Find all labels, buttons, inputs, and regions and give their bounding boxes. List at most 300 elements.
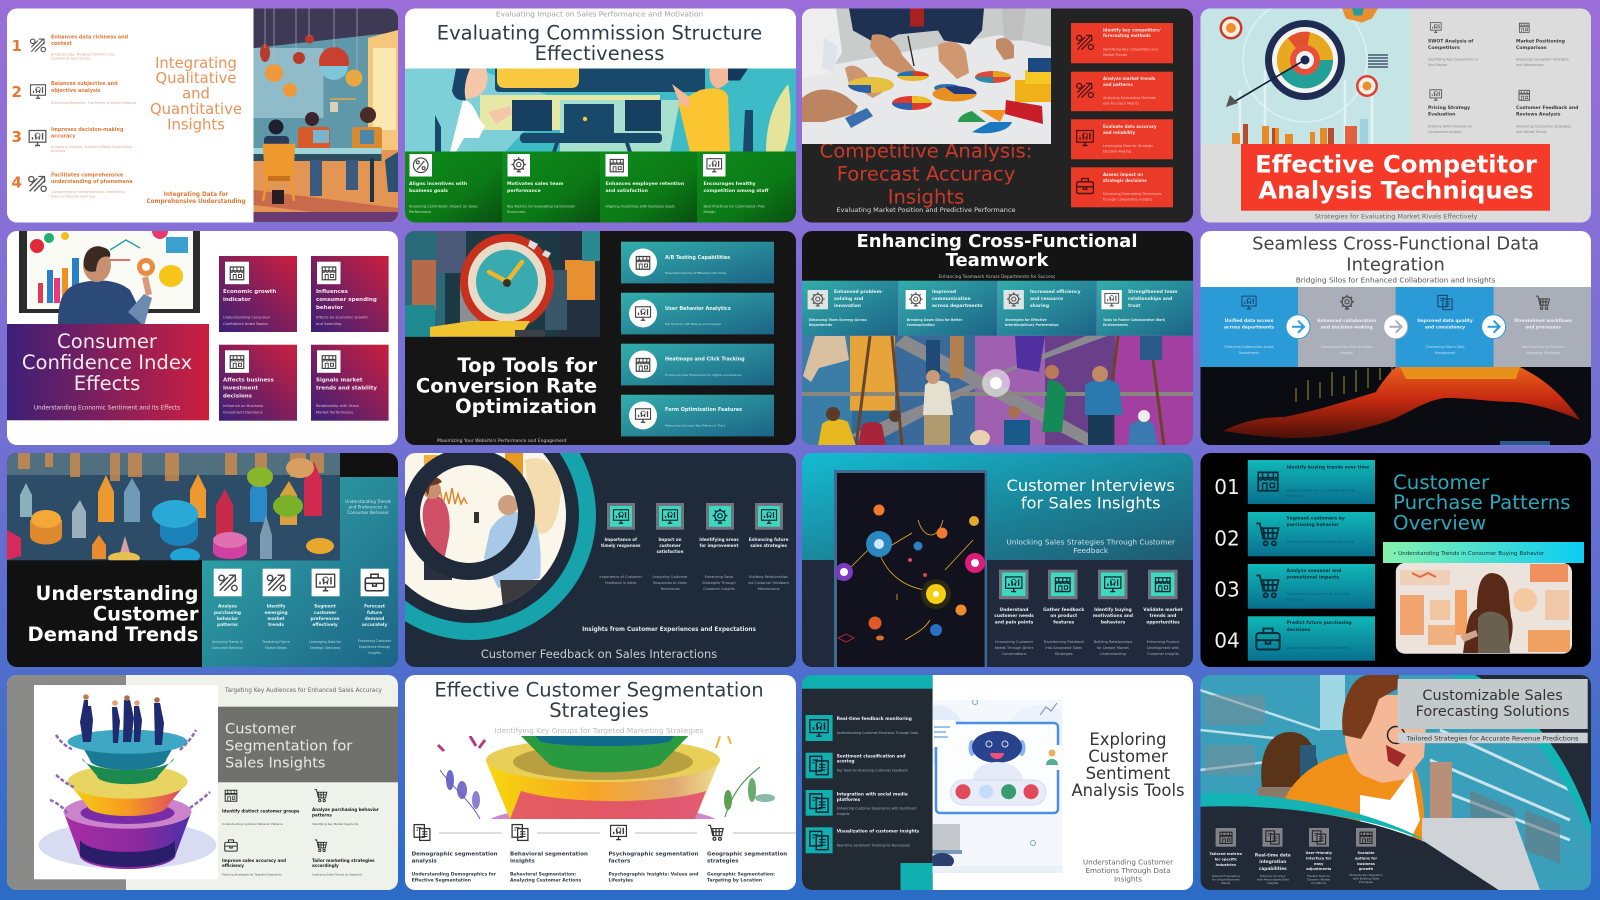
item 2: Transforming Feedback xyxy=(1042,640,1085,644)
illustration: target and arrow xyxy=(1200,0,1410,144)
item 3: Evaluate data accuracy xyxy=(1103,124,1157,129)
item 2 xyxy=(1516,23,1569,67)
item 4: Visualization of customer insights xyxy=(837,829,920,835)
item 1: Tailored Forecasting xyxy=(1211,874,1240,878)
item 3: Enhances employee retention xyxy=(606,181,684,187)
item 3 xyxy=(12,127,132,153)
item 4: 4 xyxy=(12,174,22,192)
item 4 xyxy=(1349,828,1383,884)
panel: Customer Segmentation for Sales Insights xyxy=(7,675,398,890)
item 3 xyxy=(309,569,342,650)
tool 4: Measuring Success: Key Metrics to Track xyxy=(665,424,726,428)
column 4: Best Practices for Effective xyxy=(1522,345,1564,349)
item 2: Analyzing Competitor Strengths xyxy=(1516,58,1569,62)
column 1: Unified data access xyxy=(1225,318,1274,324)
item 1: Uncovering Customer xyxy=(995,640,1034,644)
item 4: Customer Insights xyxy=(1147,652,1179,656)
item 4: Tools to Foster Collaborative Work xyxy=(1103,318,1166,322)
subtitle bar: Tailored Strategies for Accurate Revenue Predictions xyxy=(1406,734,1579,742)
item 2: Comparison xyxy=(1516,45,1547,51)
subtitle: Comprehensive Understanding xyxy=(146,199,246,205)
row 01: Identify buying trends over time xyxy=(1286,464,1369,470)
item 1: Qualitative Approaches xyxy=(51,56,91,60)
item 2: Analyzing Customer xyxy=(652,575,688,579)
item 1 xyxy=(1071,23,1173,63)
title: Teamwork xyxy=(946,250,1049,271)
panel: Effective Competitor Analysis Techniques xyxy=(1200,0,1592,222)
title: Customizable Sales xyxy=(1422,688,1563,704)
item 2: Identifying Key Market Segments xyxy=(312,822,359,826)
arrow 1 xyxy=(1286,315,1310,339)
item 1: Importance of xyxy=(604,537,637,542)
item 3: Interdisciplinary Partnerships xyxy=(1005,323,1059,327)
tile 2: consumer spending xyxy=(316,297,377,303)
item 3: easy xyxy=(1314,862,1324,866)
subtitle: Strategies for Evaluating Market Rivals Effectively xyxy=(1315,212,1477,220)
panel: Understanding Customer Demand Trends xyxy=(7,453,398,667)
tool 1 xyxy=(621,242,774,283)
subtitle: Unlocking Sales Strategies Through Customer xyxy=(1006,538,1176,546)
item 3: Segment xyxy=(314,604,336,610)
item 2: and Accuracy Metrics xyxy=(1103,102,1140,106)
step 1 xyxy=(412,825,502,884)
item 3: adjustments xyxy=(1306,867,1331,871)
item 2 xyxy=(312,790,379,826)
item 4: Reviews Analysis xyxy=(1516,112,1561,118)
bottom panel xyxy=(802,560,1193,667)
item 2: Motivates sales team xyxy=(507,181,564,187)
title: Sentiment xyxy=(1086,764,1171,783)
item 3: 3 xyxy=(12,128,22,146)
item 4: Enhancing Forecasting Techniques xyxy=(1103,192,1162,196)
step 1: analysis xyxy=(412,858,438,864)
title: Customer xyxy=(93,602,199,626)
item 3: Integration with social media xyxy=(837,792,908,798)
item 4 xyxy=(806,827,920,853)
item 4 xyxy=(12,172,133,198)
top gradient xyxy=(802,453,1193,560)
column 2: and decision-making xyxy=(1321,324,1373,330)
column 3 xyxy=(1396,287,1494,367)
tile 1: Economic growth xyxy=(223,289,276,295)
item 1: forecasting methods xyxy=(1103,33,1151,38)
row 04 xyxy=(1214,616,1375,661)
item 3: effectively xyxy=(312,622,338,628)
store photo background xyxy=(1200,675,1592,890)
item 4: demand xyxy=(365,616,384,622)
item 1: Understanding Customer Emotions Through Data xyxy=(837,731,918,735)
item 4 xyxy=(358,569,392,655)
item 1: Identify distinct customer groups xyxy=(222,808,300,814)
item 2 xyxy=(1042,570,1085,656)
item 4: and Market Trends xyxy=(1516,130,1547,134)
item 2: Sentiment classification and xyxy=(837,754,906,760)
row 03: Frequency xyxy=(1286,598,1305,602)
item 1: timely responses xyxy=(601,543,641,548)
title: Conversion Rate xyxy=(416,374,597,398)
panel: Exploring Customer Sentiment Analysis Tools xyxy=(802,675,1193,890)
item 1 xyxy=(599,503,643,585)
item 3: Building Relationships xyxy=(1094,640,1132,644)
caption: Consumer Behavior xyxy=(347,510,389,515)
item 2: market xyxy=(267,616,285,622)
kicker: Evaluating Impact on Sales Performance and Motivation xyxy=(496,10,703,18)
panel: Customer Purchase Patterns Overview xyxy=(1200,453,1592,667)
tile 3: investment xyxy=(223,386,258,392)
item 1: Analyze xyxy=(218,604,237,610)
item 3: interface for xyxy=(1306,856,1332,860)
panel background xyxy=(7,675,398,890)
item 2: Responses to Sales xyxy=(653,581,687,585)
row 01: Behavior xyxy=(1286,494,1303,498)
item 2: 2 xyxy=(12,83,22,101)
item 4: Enhancing Product xyxy=(1147,640,1180,644)
column 2 xyxy=(1298,287,1396,367)
illustration: sentiment robot xyxy=(905,700,1075,873)
teal column 2 xyxy=(898,281,997,336)
step 2: Analyzing Customer Actions xyxy=(510,878,581,884)
title: Consumer xyxy=(57,330,158,353)
subtitle: Bridging Silos for Enhanced Collaboration and Insights xyxy=(1296,276,1496,284)
item 2: trends xyxy=(268,622,284,628)
item 4: Strengthened team xyxy=(1128,289,1178,295)
step 4 xyxy=(707,825,796,884)
step 1: Understanding Demographics for xyxy=(412,872,497,878)
step 3: Psychographic Insights: Values and xyxy=(608,872,698,878)
tile 1: Understanding Consumer xyxy=(223,316,271,320)
item 1 xyxy=(1210,828,1242,885)
item 2: Strategies xyxy=(1055,652,1073,656)
row 02: Factors Influencing Purchase Decisions xyxy=(1286,540,1355,544)
item 4: Environments xyxy=(1103,323,1128,327)
item 2: Communication xyxy=(907,323,935,327)
item 1: Needs xyxy=(1221,881,1231,885)
title: and xyxy=(182,86,210,102)
tool 2: User Behavior Analytics xyxy=(665,306,731,312)
step 3: factors xyxy=(608,858,631,864)
item 3: Analysis xyxy=(51,149,65,153)
item 2: Structures xyxy=(507,210,525,214)
item 3: Identify buying xyxy=(1094,607,1132,613)
title: Customer xyxy=(1088,747,1168,766)
item 4: Analyzing Sales Trends by Segment xyxy=(312,872,363,876)
panel background xyxy=(802,8,1193,222)
item 1: Understand xyxy=(1000,607,1028,613)
row 03 xyxy=(1214,564,1375,609)
item 4: Enhancing future xyxy=(749,537,789,542)
title: Analysis Tools xyxy=(1071,781,1185,800)
item 1: Departments xyxy=(809,323,832,327)
item 4: opportunities xyxy=(1146,620,1180,626)
item 3: accuracy xyxy=(51,134,76,140)
item 3: User-friendly xyxy=(1305,851,1333,855)
item 1: Tailored metrics xyxy=(1210,852,1242,856)
tool 2: Top Tools for A/B Testing and Analysis xyxy=(664,322,721,326)
man with glasses xyxy=(1279,675,1540,890)
item 2: Gather feedback xyxy=(1043,607,1084,613)
tile 2: Influences xyxy=(316,289,349,295)
item 3: Understanding xyxy=(1100,652,1126,656)
dark curved panel xyxy=(1200,806,1499,890)
item 3: platforms xyxy=(837,797,861,803)
item 4: strategic decisions xyxy=(1103,178,1147,183)
arrow 2 xyxy=(1384,315,1408,339)
item 2: and Weaknesses xyxy=(1516,63,1544,67)
panel background xyxy=(405,8,796,222)
row 04: 04 xyxy=(1214,628,1240,652)
item 2: features xyxy=(1053,620,1074,626)
item 2: objective analysis xyxy=(51,88,101,94)
tool 4: Form Optimization Features xyxy=(665,407,742,413)
tile 4: Signals market xyxy=(316,378,363,384)
item 4: sales strategies xyxy=(750,543,788,548)
panel background xyxy=(405,231,796,445)
step 2: Behavioral Segmentation: xyxy=(510,872,576,878)
title: Seamless Cross-Functional Data xyxy=(1252,234,1539,254)
title: Sales Insights xyxy=(225,754,326,772)
title: Top Tools for xyxy=(457,354,597,377)
title: Insights xyxy=(167,116,225,134)
item 1 xyxy=(12,34,129,60)
subtitle: Feedback xyxy=(1073,546,1109,555)
item 3: customer xyxy=(314,610,337,616)
tile 3: decisions xyxy=(223,394,253,400)
teal column 4 xyxy=(1097,281,1193,336)
step 1: Effective Segmentation xyxy=(412,878,471,884)
row 02: purchasing behavior xyxy=(1286,522,1339,528)
column 4: and processes xyxy=(1525,324,1561,330)
item 1: Identifying Key Competitors and xyxy=(1103,48,1158,52)
panel: Integrating Qualitative and Quantitative Insights xyxy=(7,8,398,222)
item 1: solving and xyxy=(834,296,863,302)
item 4 xyxy=(1143,570,1183,656)
gray side strip xyxy=(7,675,126,890)
item 3: efficiency xyxy=(222,863,244,868)
title: for Sales Insights xyxy=(1021,494,1161,512)
item 2: across departments xyxy=(932,303,983,309)
item 4 xyxy=(1071,167,1173,207)
column 3: Overcoming Silos in Data xyxy=(1425,345,1465,349)
title: Forecast Accuracy xyxy=(837,162,1016,186)
dark inner ring xyxy=(412,456,526,572)
tool 1: Essential Features of Effective CRO Tools xyxy=(665,271,726,275)
item 2: Real-time data xyxy=(1255,852,1291,858)
column 3: and consistency xyxy=(1425,324,1465,330)
column 1: across departments xyxy=(1224,324,1274,330)
title: Analysis Techniques xyxy=(1258,176,1534,204)
row 04: Analyzing Seasonal Buying Patterns xyxy=(1286,646,1349,650)
item 4: Scalable xyxy=(1357,851,1375,855)
item 1: Analyzing Commission Impact on Sales xyxy=(409,204,478,208)
tile 2: Effects on Economic Growth xyxy=(316,316,369,320)
item 3: Improves decision-making xyxy=(51,127,124,133)
column 4: Integration Strategies xyxy=(1526,351,1560,355)
column 3: Management xyxy=(1435,351,1456,355)
item 4: competition among staff xyxy=(704,188,769,194)
item 1: Understanding Customer Behavior Patterns xyxy=(222,822,283,826)
item 2: Improved xyxy=(932,289,956,295)
column 1 xyxy=(1200,287,1298,367)
item 1: Bridging Data: Merging Statistics and xyxy=(51,52,114,56)
item 2 xyxy=(1255,828,1291,885)
item 3: and resource xyxy=(1030,296,1063,302)
step 3: Psychographic segmentation xyxy=(608,852,698,858)
subtitle bar xyxy=(1383,542,1584,563)
title block xyxy=(1398,679,1588,729)
item 2: performance xyxy=(507,188,541,194)
teal ring xyxy=(354,398,588,632)
column 2: Enhanced collaboration xyxy=(1317,318,1376,324)
item 2 xyxy=(652,503,688,591)
item 1 xyxy=(222,790,300,826)
panel: Seamless Cross-Functional Data Integration xyxy=(1200,231,1592,445)
item 3: Insights xyxy=(837,812,850,816)
subtitle: Emotions Through Data xyxy=(1086,866,1170,875)
item 1: SWOT Analysis of xyxy=(1428,38,1474,44)
subtitle: Evaluating Market Position and Predictive Performance xyxy=(836,206,1016,214)
item 4: Building Relationships xyxy=(749,575,788,579)
title: Effective Competitor xyxy=(1255,150,1537,178)
item 2: scoring xyxy=(837,758,854,764)
tile 3: Influence on Business xyxy=(223,404,263,408)
arrow 3 xyxy=(1482,315,1506,339)
tile 2: behavior xyxy=(316,305,344,311)
item 3: Utilizing SWOT Analysis for xyxy=(1428,124,1473,128)
item 4: Mechanisms xyxy=(758,587,780,591)
item 2: Enhance Accuracy xyxy=(1260,874,1286,878)
column 3: Improved data quality xyxy=(1417,318,1473,324)
item 2: Market Needs xyxy=(265,646,287,650)
tile 1 xyxy=(219,256,297,332)
item 4: accordingly xyxy=(312,863,339,868)
title: Competitive Analysis: xyxy=(820,140,1032,162)
title: Evaluating Commission Structure xyxy=(437,22,762,44)
item 1 xyxy=(1428,23,1478,67)
item 4: relationships and xyxy=(1128,296,1172,302)
item 2 xyxy=(906,289,983,327)
item 3: Leveraging Data for Strategic xyxy=(1103,144,1153,148)
item 1: Consumer Behavior xyxy=(212,646,244,650)
kicker: Targeting Key Audiences for Enhanced Sales Accuracy xyxy=(224,688,383,694)
row 01: Identifying Trends in Consumer Buying xyxy=(1286,488,1354,492)
tool 3: Heatmaps and Click Tracking xyxy=(665,356,745,362)
item 2: on product xyxy=(1050,613,1077,619)
title: Segmentation for xyxy=(225,738,352,754)
tile 4: Relationship with Stock xyxy=(316,404,360,408)
row 04: decisions xyxy=(1286,627,1310,633)
title: Overview xyxy=(1393,512,1486,534)
item 2: satisfaction xyxy=(656,549,684,554)
item 4: Monitoring Competitor Strategies xyxy=(1516,124,1571,128)
title: Understanding xyxy=(36,582,198,605)
item 3: Enhancing Customer Experience with Sentiment xyxy=(837,806,917,810)
subtitle: Insights xyxy=(1114,874,1142,884)
tile 3 xyxy=(219,345,297,421)
item 1: Enhanced problem- xyxy=(834,289,883,295)
item 4: trends and xyxy=(1150,613,1176,619)
title block xyxy=(7,324,209,420)
item 4: Encourages healthy xyxy=(704,181,756,187)
item 1: Performance xyxy=(409,210,431,214)
panel background xyxy=(1200,231,1592,287)
panel background xyxy=(1200,8,1592,222)
item 4 xyxy=(312,840,375,876)
item 1: customer needs xyxy=(994,613,1034,619)
item 1: Needs Through Direct xyxy=(995,646,1034,650)
item 2: patterns xyxy=(312,812,332,818)
item 1 xyxy=(212,569,244,650)
item 3: sharing xyxy=(1030,303,1049,309)
item 3: Identifying areas xyxy=(699,537,739,542)
item 4 xyxy=(703,154,769,214)
title: Insights xyxy=(888,186,964,208)
panel: Top Tools for Conversion Rate Optimization xyxy=(405,231,796,445)
item 4: Validate market xyxy=(1143,607,1183,613)
data landscape image xyxy=(1200,367,1592,445)
tool 4 xyxy=(621,395,774,436)
item 1: purchasing xyxy=(214,610,241,616)
step 2 xyxy=(510,825,600,884)
item 1: Competitors xyxy=(1428,45,1460,51)
item 1: Market Trends xyxy=(1103,53,1127,57)
panel background xyxy=(7,8,398,222)
item 2: Top Tools for Analyzing Customer Feedback xyxy=(836,768,908,772)
item 1: industries xyxy=(1216,863,1236,867)
item 1 xyxy=(409,154,478,214)
panel: Customer Interviews for Sales Insights xyxy=(802,453,1193,667)
green column 3 xyxy=(600,152,697,222)
column 4 xyxy=(1494,287,1592,367)
panel background xyxy=(405,675,796,890)
item 3: Strategies for Effective xyxy=(1005,318,1047,322)
teal corner block xyxy=(900,863,933,890)
panel: Competitive Analysis Forecast Accuracy Insights xyxy=(802,8,1193,222)
panel background xyxy=(7,231,398,445)
panel background xyxy=(1200,453,1592,667)
row 01 xyxy=(1214,460,1375,504)
tile 1: indicator xyxy=(223,297,251,303)
item 4: Development with xyxy=(1147,646,1179,650)
bold insight line: Insights from Customer Experiences and Expectations xyxy=(582,627,756,633)
item 3: Aligning Incentives with Business Goals xyxy=(606,204,675,208)
item 2: Key Metrics for Evaluating Commission xyxy=(507,204,575,208)
title: Customer xyxy=(1393,471,1490,494)
item 3: Strategic Decisions xyxy=(310,646,341,650)
panel: Effective Customer Segmentation Strategies xyxy=(405,675,796,890)
item 1: Identifying Key Competitors in xyxy=(1428,58,1478,62)
tile 2: and Spending xyxy=(316,322,341,326)
step 2: Behavioral segmentation xyxy=(510,852,588,858)
title: Exploring xyxy=(1089,730,1167,749)
photo: hands over pie chart papers xyxy=(802,8,1051,144)
panel: Consumer Confidence Index Effects xyxy=(7,223,398,445)
item 1: behavior xyxy=(217,616,239,622)
title: Effects xyxy=(74,372,140,395)
item 4: through Competitive Insights xyxy=(1103,198,1153,202)
item 4: business xyxy=(1357,862,1375,866)
row 04: Predict future purchasing xyxy=(1286,620,1352,626)
item 4 xyxy=(1516,90,1578,134)
item 3: Flexible Tools for xyxy=(1307,874,1331,878)
item 1: for specific xyxy=(1215,858,1237,862)
item 3: motivations and xyxy=(1093,613,1133,619)
title block xyxy=(218,707,398,782)
title: Quantitative xyxy=(150,101,242,118)
item 4: Best Practices for Commission Plan xyxy=(704,204,765,208)
item 2: integration xyxy=(1259,859,1286,865)
illustration: cropped funnel with plants xyxy=(438,736,775,845)
item 4: Comprehensive Understanding: Unearthing xyxy=(51,190,125,194)
